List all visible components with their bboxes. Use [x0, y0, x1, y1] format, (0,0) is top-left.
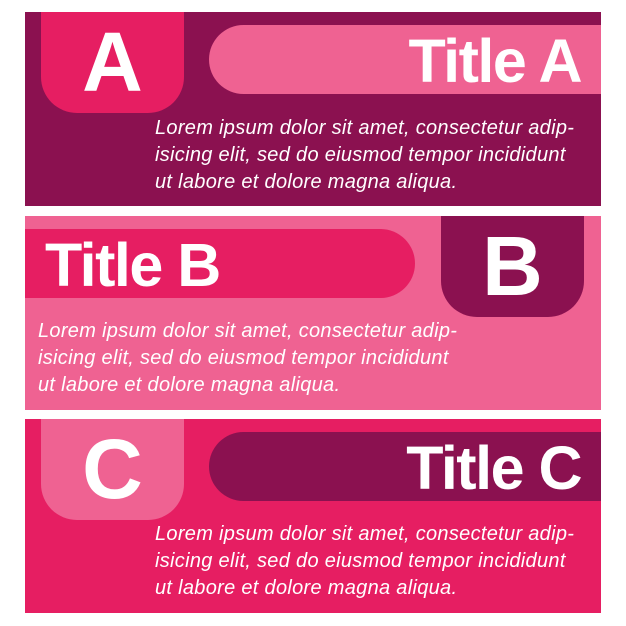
badge A — [41, 12, 184, 113]
text B: ut labore et dolore magna aliqua. — [38, 374, 340, 396]
text C: isicing elit, sed do eiusmod tempor incididunt — [155, 550, 566, 572]
text B: Lorem ipsum dolor sit amet, consectetur adip- — [38, 320, 457, 342]
text A: ut labore et dolore magna aliqua. — [155, 171, 457, 193]
panel: A — [25, 12, 601, 206]
badge C: C — [82, 422, 143, 516]
text C — [155, 523, 574, 599]
badge B — [441, 216, 584, 317]
title pill A — [209, 25, 601, 94]
text A: Lorem ipsum dolor sit amet, consectetur adip- — [155, 117, 574, 139]
title pill A: Title A — [408, 27, 581, 95]
title pill C: Title C — [406, 434, 581, 502]
title bar B: Title B — [45, 231, 220, 299]
badge B: B — [482, 219, 543, 313]
panel: C — [25, 419, 601, 613]
text A — [155, 117, 574, 193]
text A: isicing elit, sed do eiusmod tempor incididunt — [155, 144, 566, 166]
badge C — [41, 419, 184, 520]
title bar B — [25, 229, 415, 298]
panel: B — [25, 216, 601, 410]
text B: isicing elit, sed do eiusmod tempor incididunt — [38, 347, 449, 369]
text C: Lorem ipsum dolor sit amet, consectetur adip- — [155, 523, 574, 545]
text C: ut labore et dolore magna aliqua. — [155, 577, 457, 599]
badge A: A — [82, 15, 143, 109]
text B — [38, 320, 457, 396]
title pill C — [209, 432, 601, 501]
